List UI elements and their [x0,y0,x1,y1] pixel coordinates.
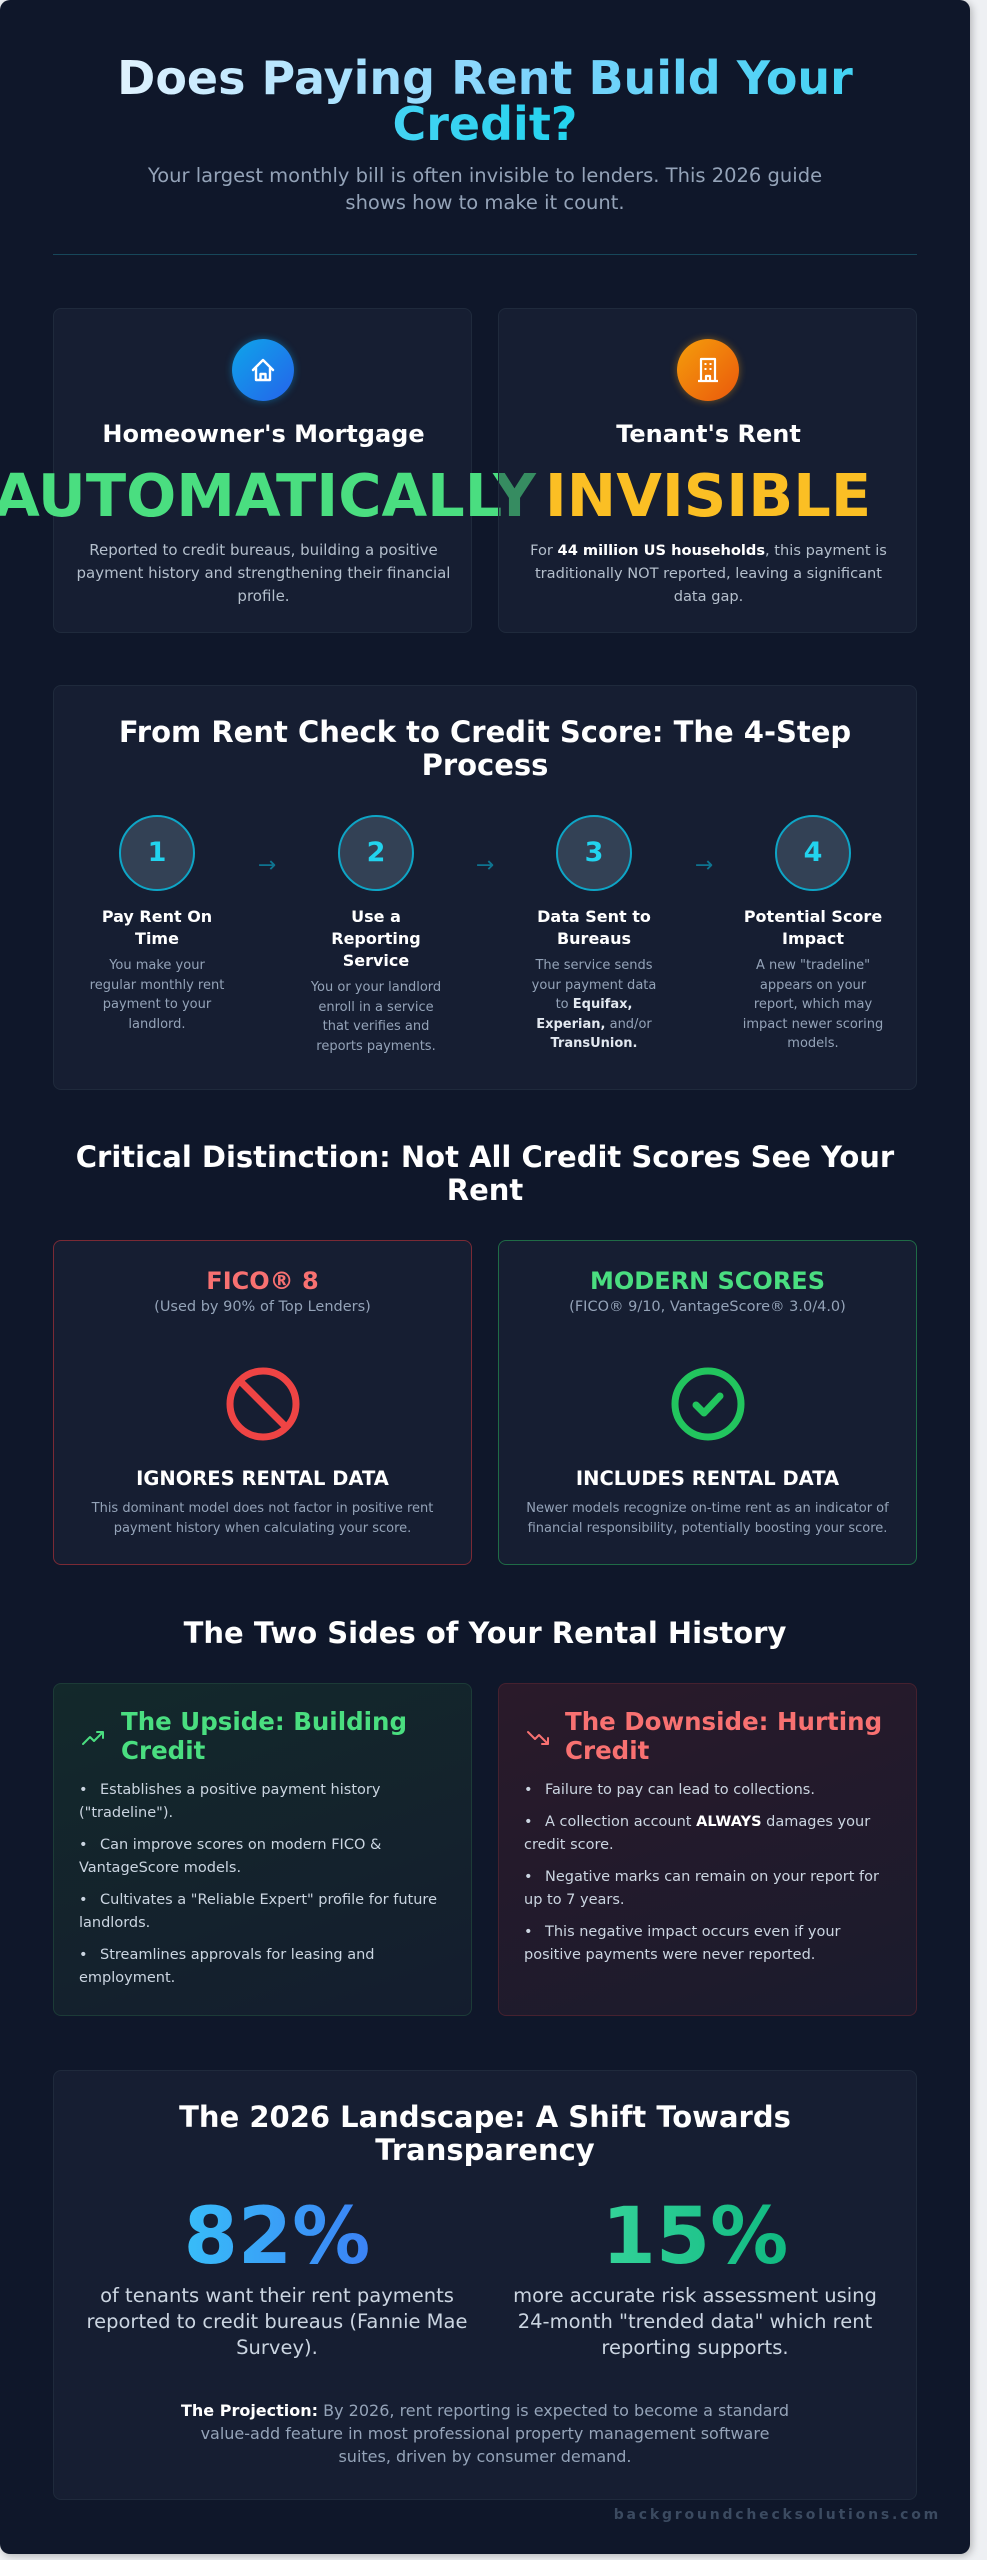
step 2: 2 [367,837,385,868]
step 1: You make your [109,958,205,973]
upside bullets: ("tradeline"). [79,1805,173,1821]
subtitle: Your largest monthly bill is often invisible to lenders. This 2026 guide [148,164,822,187]
heading: landscape: The 2026 Landscape: A Shift Towards [179,2100,791,2134]
panel: modern scores: financial responsibility, potentially boosting your score. [528,1520,887,1536]
heading: landscape [179,2100,791,2167]
upside bullets: • [79,1782,88,1798]
heading: critical distinction [76,1140,894,1207]
icon: trending down [527,1731,549,1745]
step 4: Impact [782,929,844,948]
step 2: reports payments. [316,1038,436,1054]
projection: suites, driven by consumer demand. [338,2447,632,2466]
title: Does Paying Rent Build Your [117,51,853,105]
downside bullets: credit score. [524,1837,614,1853]
panel: FICO 8: FICO® 8 [206,1267,319,1295]
upside bullets: • [79,1892,88,1908]
stat: 15%: reporting supports. [601,2336,789,2359]
arrow: → [476,853,494,878]
heading: critical distinction: Critical Distinction: Not All Credit Scores See Your [76,1140,894,1174]
step 1 [90,815,224,1032]
title: Credit? [392,97,578,151]
heading: two sides: The Two Sides of Your Rental History [184,1616,786,1650]
panel: FICO 8: This dominant model does not factor in positive rent [92,1501,433,1516]
step 3 [532,815,656,1051]
step 3: TransUnion. [550,1036,638,1051]
upside bullets: • [79,1947,88,1963]
heading: process [119,715,851,782]
step 1: regular monthly rent [90,978,224,992]
step 3: Experian, and/or [536,1016,652,1032]
panel: FICO 8 [53,1240,472,1565]
downside bullets: • [524,1814,533,1830]
big word: INVISIBLE [545,461,871,530]
panel: modern scores: INCLUDES RENTAL DATA [576,1467,839,1490]
step 1: Pay Rent On [102,907,212,926]
panel: FICO 8: payment history when calculating your score. [114,1520,411,1536]
downside bullets: This negative impact occurs even if your [545,1924,840,1940]
heading: landscape: Transparency [375,2133,595,2167]
step 3: Bureaus [557,929,631,948]
downside bullets: • [524,1924,533,1940]
panel: upside [53,1683,472,2016]
projection: value-add feature in most professional property management software [201,2424,769,2443]
icon: trending up [82,1731,104,1745]
upside heading: Credit [121,1736,205,1765]
panel: homeowner's mortgage [53,308,472,633]
arrow: → [695,853,713,878]
big word: AUTOMATICALLY [0,461,536,530]
icon: prohibited [226,1368,300,1440]
title [117,51,853,151]
step 4: appears on your [760,978,866,992]
arrow: → [258,853,276,878]
heading: Tenant's Rent [616,420,801,448]
upside bullets: Can improve scores on modern FICO & [100,1837,381,1853]
step 3: your payment data [532,978,656,992]
upside heading: The Upside: Building [121,1707,407,1736]
panel: modern scores: MODERN SCORES [590,1267,825,1295]
step 4: Potential Score [744,907,882,926]
description: payment history and strengthening their financial [77,564,450,582]
stat: 15%: more accurate risk assessment using [513,2284,877,2307]
panel: 4-step process [53,685,917,1090]
step 3: to Equifax, [556,997,632,1012]
step 2: that verifies and [323,1019,429,1034]
description: traditionally NOT reported, leaving a significant [535,565,882,582]
step 4: A new "tradeline" [756,958,870,973]
description: data gap. [674,588,743,605]
downside heading: Credit [565,1736,649,1765]
upside bullets: Cultivates a "Reliable Expert" profile for future [100,1892,437,1908]
upside bullets [79,1782,437,1986]
icon: house [232,339,294,401]
upside bullets: employment. [79,1970,175,1986]
panel: FICO 8: (Used by 90% of Top Lenders) [154,1299,371,1315]
step 3: Data Sent to [537,907,651,926]
step 4 [743,815,883,1051]
subtitle [148,164,822,214]
upside bullets: Establishes a positive payment history [100,1782,380,1798]
projection: The Projection: By 2026, rent reporting is expected to become a standard [181,2401,789,2420]
description [530,542,887,605]
stat: 15% [513,2192,877,2359]
step 2: Reporting [331,929,421,948]
heading: critical distinction: Rent [447,1173,523,1207]
description: Reported to credit bureaus, building a positive [89,541,438,559]
step 4: impact newer scoring [743,1016,883,1032]
stat: 82%: 82% [184,2192,370,2282]
step 4: models. [787,1036,839,1051]
step 3: The service sends [535,958,653,973]
stat: 82%: of tenants want their rent payments [100,2284,454,2307]
step 4: report, which may [754,997,872,1012]
downside bullets: Negative marks can remain on your report for [545,1869,879,1885]
footer: backgroundchecksolutions.com [614,2507,941,2523]
panel: modern scores: (FICO® 9/10, VantageScore® 3.0/4.0) [569,1299,846,1315]
projection [181,2401,789,2466]
step 4: 4 [804,837,822,868]
description: For 44 million US households, this payment is [530,542,887,559]
icon: building [677,339,739,401]
downside bullets: Failure to pay can lead to collections. [545,1782,815,1798]
stat: 82% [87,2192,467,2359]
downside bullets: A collection account ALWAYS damages your [545,1814,870,1830]
step 1: landlord. [128,1016,186,1032]
step 2 [310,815,441,1054]
downside bullets: positive payments were never reported. [524,1947,815,1963]
downside bullets: up to 7 years. [524,1892,625,1908]
panel: tenant's rent [498,308,917,633]
description: profile. [237,587,290,605]
stat: 15%: 24-month "trended data" which rent [518,2310,872,2333]
panel: FICO 8: IGNORES RENTAL DATA [136,1467,389,1490]
downside bullets [524,1782,879,1963]
heading: Homeowner's Mortgage [102,420,425,448]
downside bullets: • [524,1782,533,1798]
downside heading [565,1707,882,1765]
stat: 82%: Survey). [236,2336,318,2359]
downside bullets: • [524,1869,533,1885]
step 1: 1 [148,837,166,868]
heading: process: Process [422,748,548,782]
step 1: payment to your [103,997,211,1012]
panel: modern scores: Newer models recognize on-time rent as an indicator of [526,1501,889,1516]
step 1: Time [135,929,179,948]
step 3: 3 [585,837,603,868]
description [77,541,450,605]
upside bullets: Streamlines approvals for leasing and [100,1947,375,1963]
panel: 2026 landscape [53,2070,917,2500]
downside heading: The Downside: Hurting [565,1707,882,1736]
stat: 15%: 15% [602,2192,788,2282]
icon: check [672,1368,744,1440]
stat: 82%: reported to credit bureaus (Fannie Mae [87,2310,467,2333]
panel: downside [498,1683,917,2016]
subtitle: shows how to make it count. [345,191,625,214]
upside bullets: VantageScore models. [79,1860,241,1876]
step 2: Service [343,951,409,970]
upside bullets: • [79,1837,88,1853]
heading: process: From Rent Check to Credit Score: The 4-Step [119,715,851,749]
step 2: You or your landlord [311,980,441,995]
step 2: enroll in a service [318,1000,434,1014]
panel: modern scores [498,1240,917,1565]
step 2: Use a [351,907,401,926]
upside bullets: landlords. [79,1915,150,1931]
upside heading [121,1707,407,1765]
